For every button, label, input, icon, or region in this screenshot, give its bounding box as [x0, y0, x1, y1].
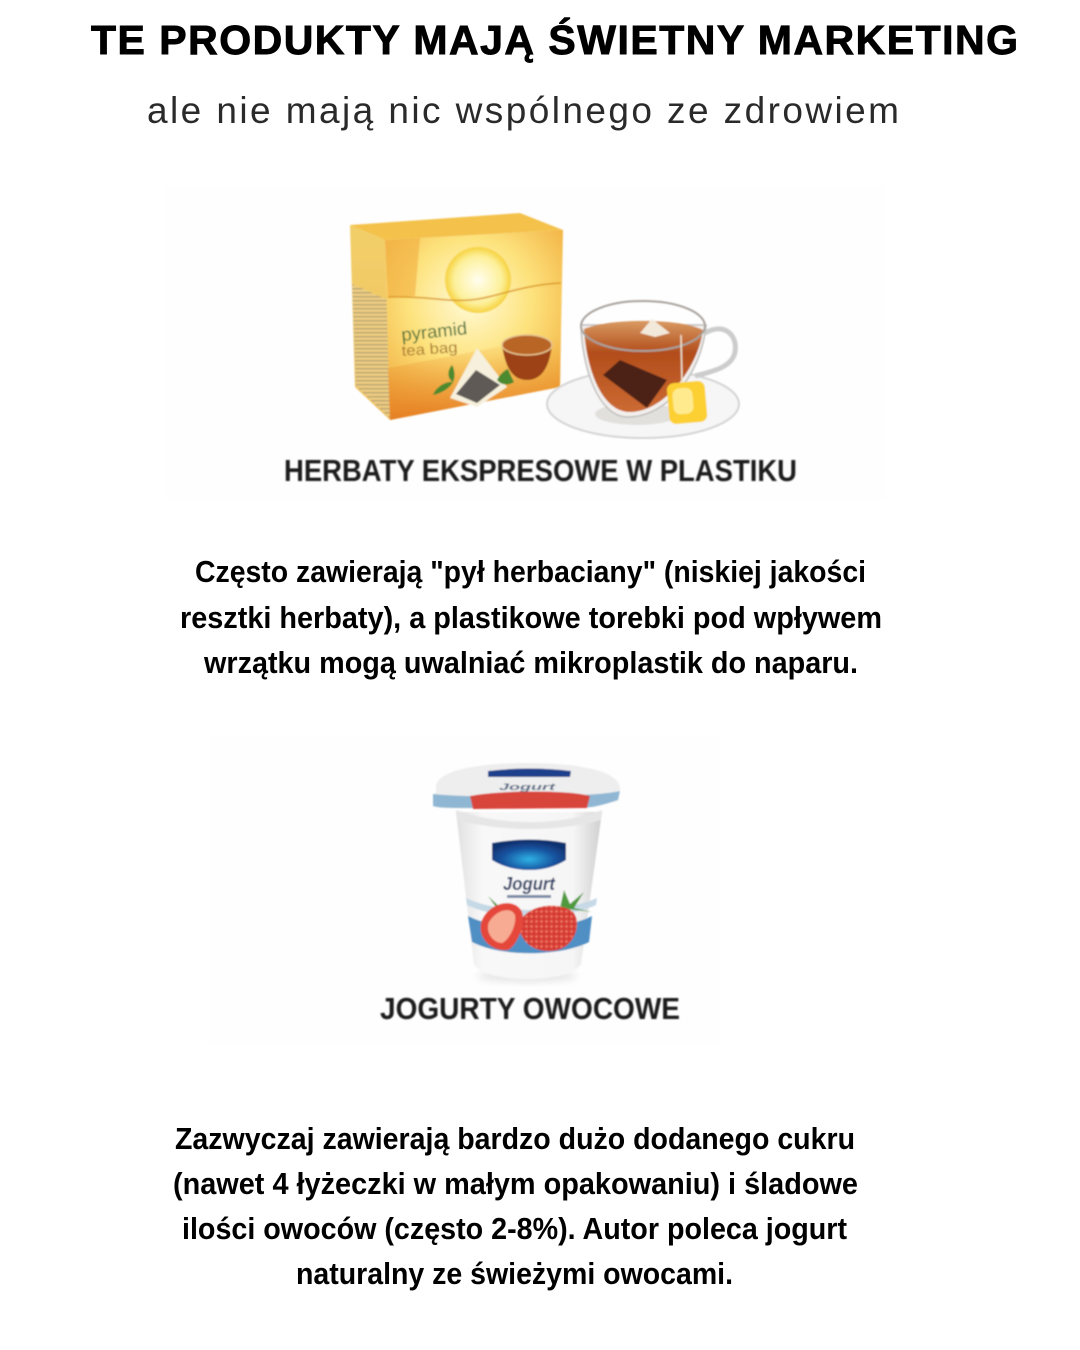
icon: tea box	[350, 213, 563, 420]
panel: yogurt product image	[210, 735, 720, 1045]
text block: yogurt description: Zazwyczaj zawierają bardzo dużo dodanego cukru	[175, 1121, 855, 1156]
text block: tea description	[180, 554, 882, 680]
icon: yogurt cup	[433, 763, 620, 982]
text block: yogurt description: (nawet 4 łyżeczki w małym opakowaniu) i śladowe	[173, 1166, 858, 1201]
text block: tea description: resztki herbaty), a plastikowe torebki pod wpływem	[180, 600, 882, 635]
icon: yogurt cup: Jogurt	[499, 782, 557, 792]
icon: tea box: tea bag	[401, 339, 458, 360]
text block: yogurt description: naturalny ze świeżymi owocami.	[296, 1256, 733, 1291]
yogurt label: JOGURTY OWOCOWE	[380, 991, 680, 1026]
tea label: HERBATY EKSPRESOWE W PLASTIKU	[284, 453, 797, 488]
title: TE PRODUKTY MAJĄ ŚWIETNY MARKETING	[91, 17, 1018, 63]
subtitle: ale nie mają nic wspólnego ze zdrowiem	[147, 90, 899, 131]
text block: tea description: wrzątku mogą uwalniać mikroplastik do naparu.	[203, 645, 858, 680]
icon: tea box: pyramid	[400, 318, 468, 345]
text block: tea description: Często zawierają "pył herbaciany" (niskiej jakości	[195, 554, 866, 589]
text block: yogurt description: ilości owoców (często 2-8%). Autor poleca jogurt	[182, 1211, 847, 1246]
text block: yogurt description	[173, 1121, 858, 1291]
icon: yogurt cup: Jogurt	[503, 874, 556, 894]
panel: tea product image	[165, 186, 885, 500]
icon: tea cup on saucer	[547, 301, 739, 438]
